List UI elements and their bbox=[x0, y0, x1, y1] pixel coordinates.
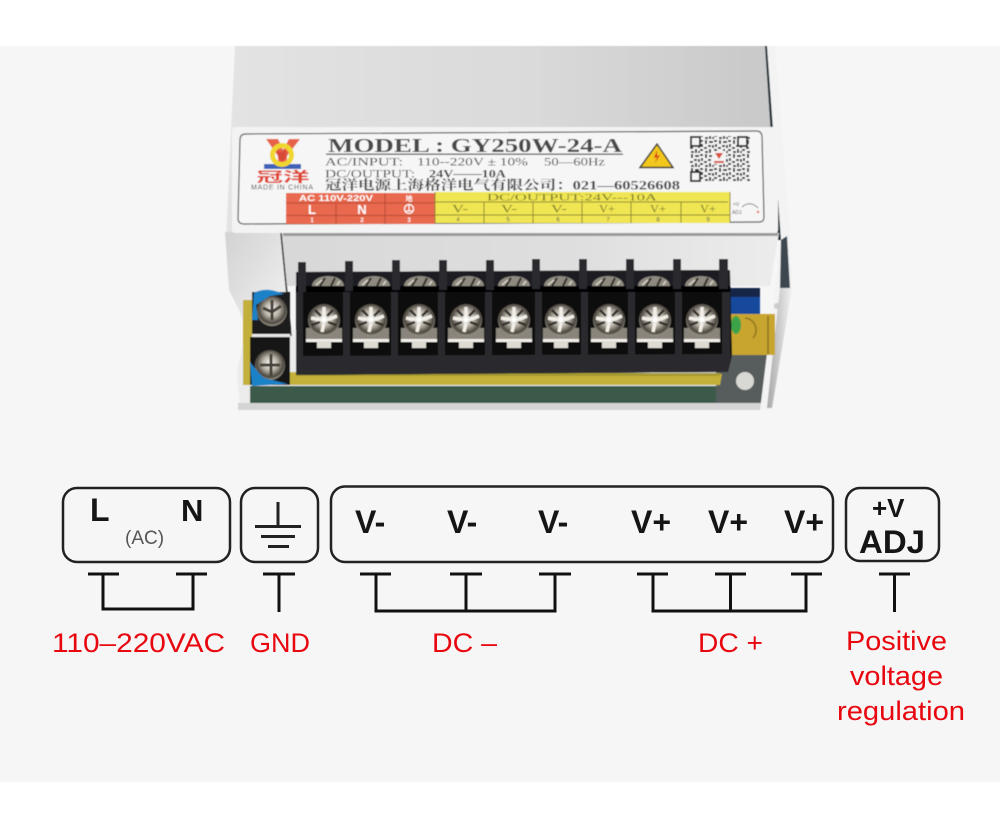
label: DC plus: DC + bbox=[698, 628, 763, 658]
input and output specification bbox=[325, 154, 681, 192]
input and output specification: 50—60Hz bbox=[544, 154, 605, 168]
circuit board right of terminal block bbox=[728, 288, 780, 355]
model title: MODEL : GY250W-24-A bbox=[328, 135, 623, 157]
terminal table: AC: L bbox=[308, 202, 316, 217]
terminal box: AC: L bbox=[90, 492, 110, 528]
base plate with circuit board bbox=[237, 330, 775, 410]
connector: ground bbox=[263, 574, 295, 612]
terminal table: DC: V- bbox=[452, 202, 468, 216]
label: positive voltage regulation: Positive bbox=[846, 626, 947, 656]
adjust marking: +V bbox=[733, 202, 740, 208]
connector: adjust bbox=[879, 574, 910, 612]
connector bracket: DC plus bbox=[637, 574, 822, 611]
white label sticker bbox=[232, 127, 778, 233]
label: positive voltage regulation: regulation bbox=[837, 696, 965, 726]
housing top panel bbox=[226, 46, 780, 240]
terminal table: DC: 4 bbox=[456, 218, 460, 224]
rear terminal screws bbox=[312, 276, 717, 286]
terminal table: DC: 8 bbox=[656, 218, 660, 224]
terminal box: DC output: V- bbox=[447, 504, 477, 540]
terminal box: ground bbox=[241, 488, 318, 562]
logo bbox=[251, 139, 313, 192]
ground bracket with screws bbox=[250, 290, 290, 386]
terminal box: AC bbox=[63, 488, 230, 562]
connector bracket: AC bbox=[88, 574, 207, 609]
terminal table: DC: V+ bbox=[700, 202, 716, 216]
icon: high voltage warning bbox=[640, 144, 673, 168]
terminal table: AC: 3 bbox=[407, 218, 411, 224]
input and output specification: 24V——10A bbox=[429, 166, 506, 180]
label: GND: GND bbox=[250, 628, 310, 658]
adjust marking bbox=[732, 202, 759, 216]
terminal box: DC output: V- bbox=[538, 504, 568, 540]
terminal box: DC output: V+ bbox=[708, 504, 748, 540]
power supply photo bbox=[225, 46, 792, 410]
terminal table: DC: 6 bbox=[556, 218, 560, 224]
input and output specification: 冠洋电源上海格洋电气有限公司：021—60526608 bbox=[325, 178, 681, 192]
terminal box: DC output: V+ bbox=[631, 504, 671, 540]
terminal table: AC: 2 bbox=[360, 218, 364, 224]
terminal table: DC bbox=[435, 192, 730, 224]
input and output specification: DC/OUTPUT: bbox=[325, 166, 415, 180]
terminal box: DC output: V- bbox=[355, 504, 385, 540]
terminal box: DC output: V+ bbox=[784, 504, 824, 540]
terminal block bbox=[296, 259, 732, 375]
label: DC minus: DC – bbox=[432, 628, 497, 658]
adjust marking: ADJ bbox=[732, 210, 742, 216]
terminal table: AC: N bbox=[357, 202, 367, 217]
circuit board strip below terminal block bbox=[243, 300, 722, 385]
front terminal screws bbox=[306, 304, 720, 348]
terminal box: DC output bbox=[331, 486, 833, 562]
front face of housing bbox=[283, 233, 779, 286]
terminal table: DC: 9 bbox=[706, 218, 710, 224]
terminal box: voltage adjust bbox=[846, 488, 939, 561]
terminal table: DC: 5 bbox=[506, 218, 510, 224]
terminal table: DC: DC/OUTPUT:24V---10A bbox=[487, 194, 657, 204]
terminal box: AC: N bbox=[181, 493, 203, 528]
connector bracket: DC minus bbox=[360, 574, 571, 611]
input and output specification: AC/INPUT: bbox=[325, 154, 403, 168]
terminal table: AC bbox=[286, 193, 435, 224]
terminal table: AC: AC 110V-220V bbox=[299, 194, 374, 203]
terminal box: AC: (AC) bbox=[125, 528, 164, 549]
logo: MADE IN CHINA bbox=[251, 184, 313, 192]
terminal box: voltage adjust: +V bbox=[872, 493, 905, 523]
terminal table: DC: V+ bbox=[650, 202, 666, 216]
QR code bbox=[690, 136, 750, 182]
logo: 冠洋 bbox=[256, 167, 310, 187]
terminal table: DC: V+ bbox=[599, 202, 615, 216]
label: positive voltage regulation: voltage bbox=[850, 661, 943, 691]
input and output specification: 110--220V ± 10% bbox=[417, 154, 528, 168]
terminal table: DC: V- bbox=[501, 202, 517, 216]
label: 110-220VAC: 110–220VAC bbox=[52, 628, 225, 658]
terminal table: AC: 1 bbox=[310, 218, 314, 224]
left flap bbox=[225, 232, 290, 336]
terminal table: DC: 7 bbox=[606, 218, 610, 224]
terminal table: DC: V- bbox=[551, 202, 567, 216]
right side panel bbox=[760, 46, 792, 410]
label: positive voltage regulation bbox=[837, 626, 965, 726]
terminal box: voltage adjust: ADJ bbox=[859, 524, 925, 560]
terminal table: AC: 地 bbox=[406, 194, 412, 204]
wiring diagram bbox=[52, 486, 965, 726]
